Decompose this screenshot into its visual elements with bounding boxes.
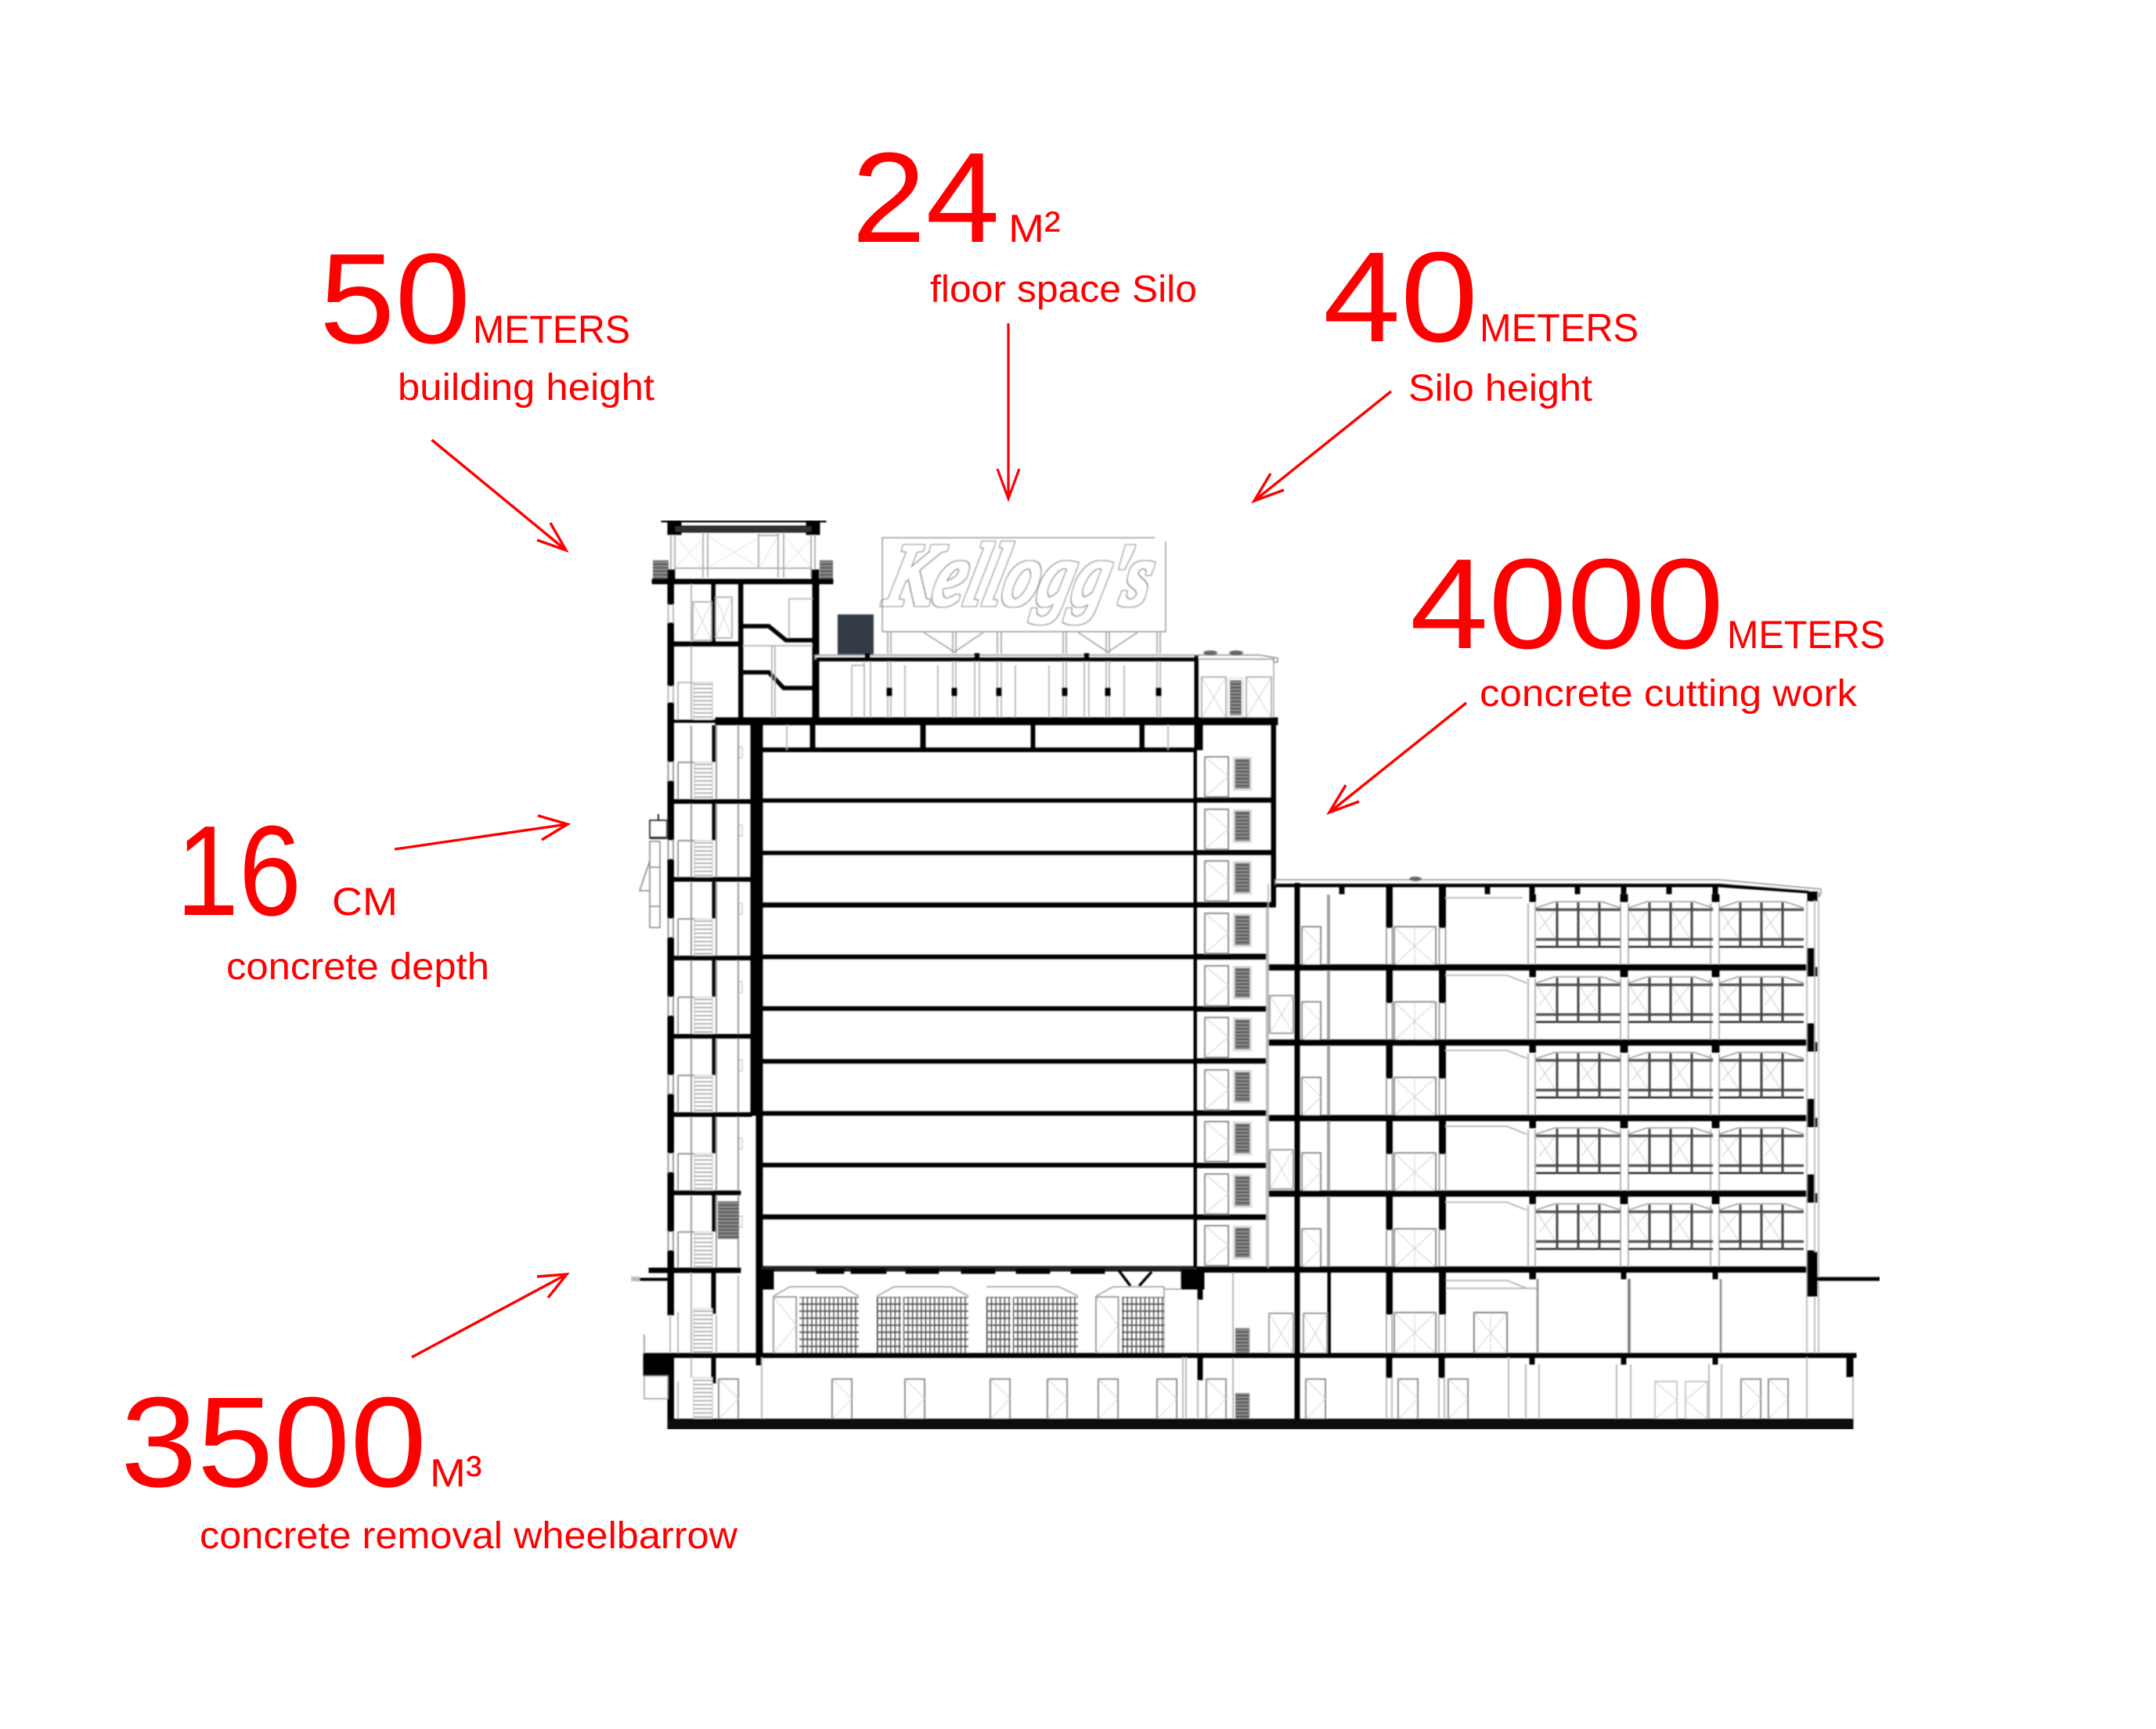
- Kellogg's logo lettering: Kellogg's: [877, 527, 1165, 624]
- basement level: [719, 1357, 1853, 1419]
- foundation slab: [668, 1419, 1853, 1429]
- unit: [1008, 202, 1061, 256]
- hoist on tower facade: [640, 814, 667, 928]
- stat: 4000 meters concrete cutting work: [1410, 532, 1885, 715]
- arrow: floor space: [997, 323, 1019, 499]
- arrow: concrete cutting: [1329, 703, 1466, 812]
- silo walls and floors: [751, 722, 1202, 1358]
- right wing floors with windows: [1198, 883, 1819, 1419]
- stat: 40 meters silo height: [1323, 225, 1639, 409]
- building cross-section drawing: [631, 521, 1880, 1429]
- caption: concrete depth: [226, 946, 489, 988]
- unit: METERS: [473, 308, 630, 351]
- unit: ²: [1044, 202, 1061, 256]
- caption: concrete cutting work: [1480, 673, 1858, 715]
- unit: M: [1008, 207, 1044, 250]
- Kellogg's rooftop sign: [877, 527, 1166, 654]
- stat: 16 cm concrete depth: [176, 799, 489, 988]
- main roof slab: [716, 718, 1278, 725]
- rooftop level with columns: [815, 650, 1278, 720]
- right wing roof: [1275, 877, 1821, 901]
- stat: 3500 m3 concrete removal wheelbarrow: [121, 1371, 737, 1557]
- tower lower floors: [631, 720, 752, 1421]
- stat: 50 meters building height: [319, 227, 654, 409]
- right stair block: [1196, 725, 1276, 1419]
- silo base with glass-block windows: [758, 1266, 1204, 1353]
- dark rooftop block: [838, 614, 874, 654]
- caption: concrete removal wheelbarrow: [200, 1515, 737, 1557]
- unit: [430, 1446, 482, 1500]
- rooftop tower room: [652, 521, 833, 584]
- number: 40: [1323, 225, 1478, 369]
- left black block at ground slab: [644, 1335, 673, 1399]
- arrow: silo height: [1254, 391, 1391, 501]
- unit: CM: [332, 880, 398, 924]
- caption: floor space Silo: [930, 269, 1197, 310]
- unit: METERS: [1480, 306, 1639, 350]
- stat: 24 m2 floor space silo: [852, 126, 1197, 310]
- number: 4000: [1410, 532, 1724, 675]
- number: 16: [176, 799, 301, 942]
- number: 24: [852, 126, 1000, 269]
- ground level of right wing: [1269, 1252, 1880, 1354]
- ground floor slab: [668, 1353, 1856, 1357]
- arrow: concrete removal: [412, 1274, 567, 1357]
- caption: Silo height: [1408, 368, 1592, 409]
- number: 3500: [121, 1371, 427, 1514]
- arrow: concrete depth: [395, 816, 568, 849]
- unit: ³: [466, 1446, 482, 1500]
- unit: M: [430, 1451, 466, 1495]
- unit: METERS: [1727, 613, 1885, 657]
- upper tower with stairs: [668, 584, 819, 723]
- number: 50: [319, 227, 470, 370]
- caption: building height: [398, 367, 654, 409]
- arrow: building height: [432, 440, 566, 550]
